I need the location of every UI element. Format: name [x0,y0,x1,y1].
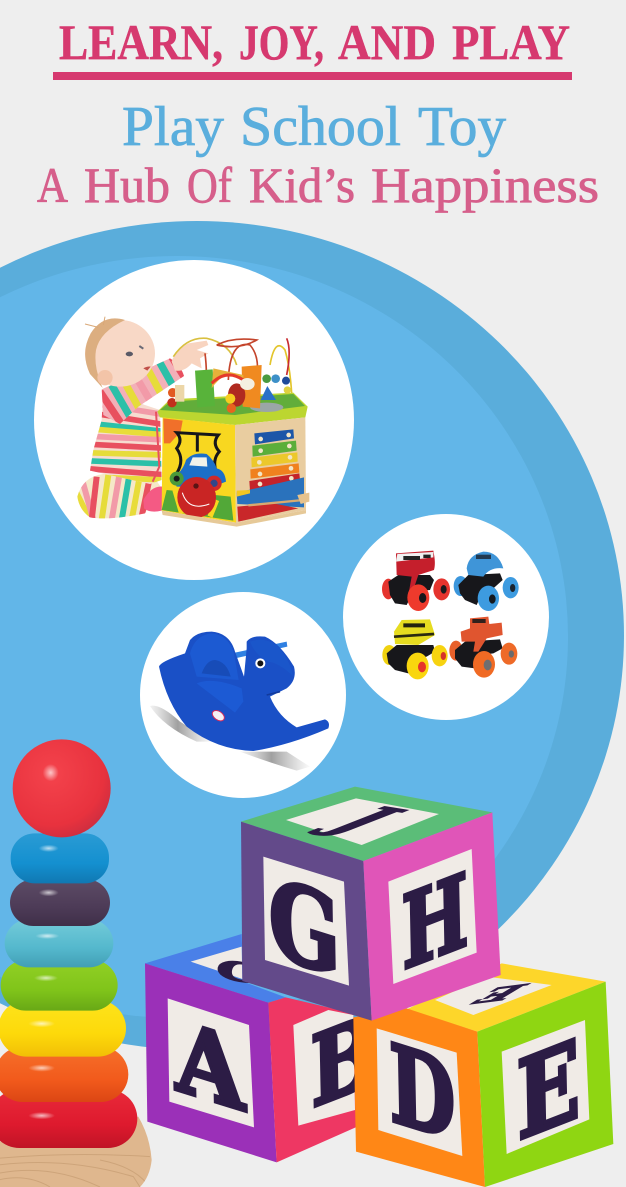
ring: dark purple [10,879,110,926]
block D E F: E [516,1016,581,1166]
ring: orange [0,1047,128,1102]
heading: Play School Toy: School [240,96,401,158]
wooden base [0,1117,152,1187]
block A B C [145,934,377,1162]
panel: baby with activity cube [34,260,354,580]
background: large blue circle [0,221,624,1050]
title: Learn, Joy, and Play: AND [338,14,436,70]
block D E F [353,963,613,1187]
ring: light teal [5,919,113,967]
block D E F: D [388,1020,457,1167]
subheading: A Hub Of Kid's Happiness: Of [187,157,232,213]
panel: toy monster trucks [343,514,549,720]
title: Learn, Joy, and Play: LEARN, [59,14,223,70]
truck: red [382,551,450,611]
block G H J: G [268,854,341,1003]
heading: Play School Toy: Toy [418,96,506,158]
truck: yellow [382,619,448,679]
ring: red [0,1089,137,1148]
title: Learn, Joy, and Play [59,14,570,70]
title: Learn, Joy, and Play: PLAY [452,14,570,70]
block G H J: H [401,850,469,993]
block G H J: J [304,799,426,839]
heading: Play School Toy [122,96,506,158]
truck: blue [454,552,519,611]
ring: yellow [0,1000,126,1057]
ring: green [1,960,118,1011]
activity cube toy [157,338,309,527]
alphabet blocks [145,787,613,1187]
truck: orange [449,617,517,678]
block A B C: B [310,992,377,1131]
subheading: A Hub Of Kid's Happiness: Hub [84,157,170,213]
title: Learn, Joy, and Play: JOY, [239,14,324,70]
heading: Play School Toy: Play [122,96,224,158]
rocking horse body [159,632,329,751]
block D E F: E [460,978,541,1009]
block A B C: A [173,999,247,1135]
subheading: A Hub Of Kid's Happiness: Happiness [371,157,599,213]
stacking ring toy [0,739,152,1187]
block G H J [241,787,501,1021]
ring: blue [11,833,109,883]
title underline [53,72,572,80]
rocking horse shadow [150,706,310,771]
subheading: A Hub Of Kid's Happiness: Kid’s [249,157,355,213]
panel: blue rocking horse [140,592,346,798]
subheading: A Hub Of Kid's Happiness: A [37,157,68,213]
red ball [13,739,111,837]
block A B C: C [214,954,263,991]
baby figure [73,317,208,520]
subheading: A Hub Of Kid's Happiness [37,157,599,213]
